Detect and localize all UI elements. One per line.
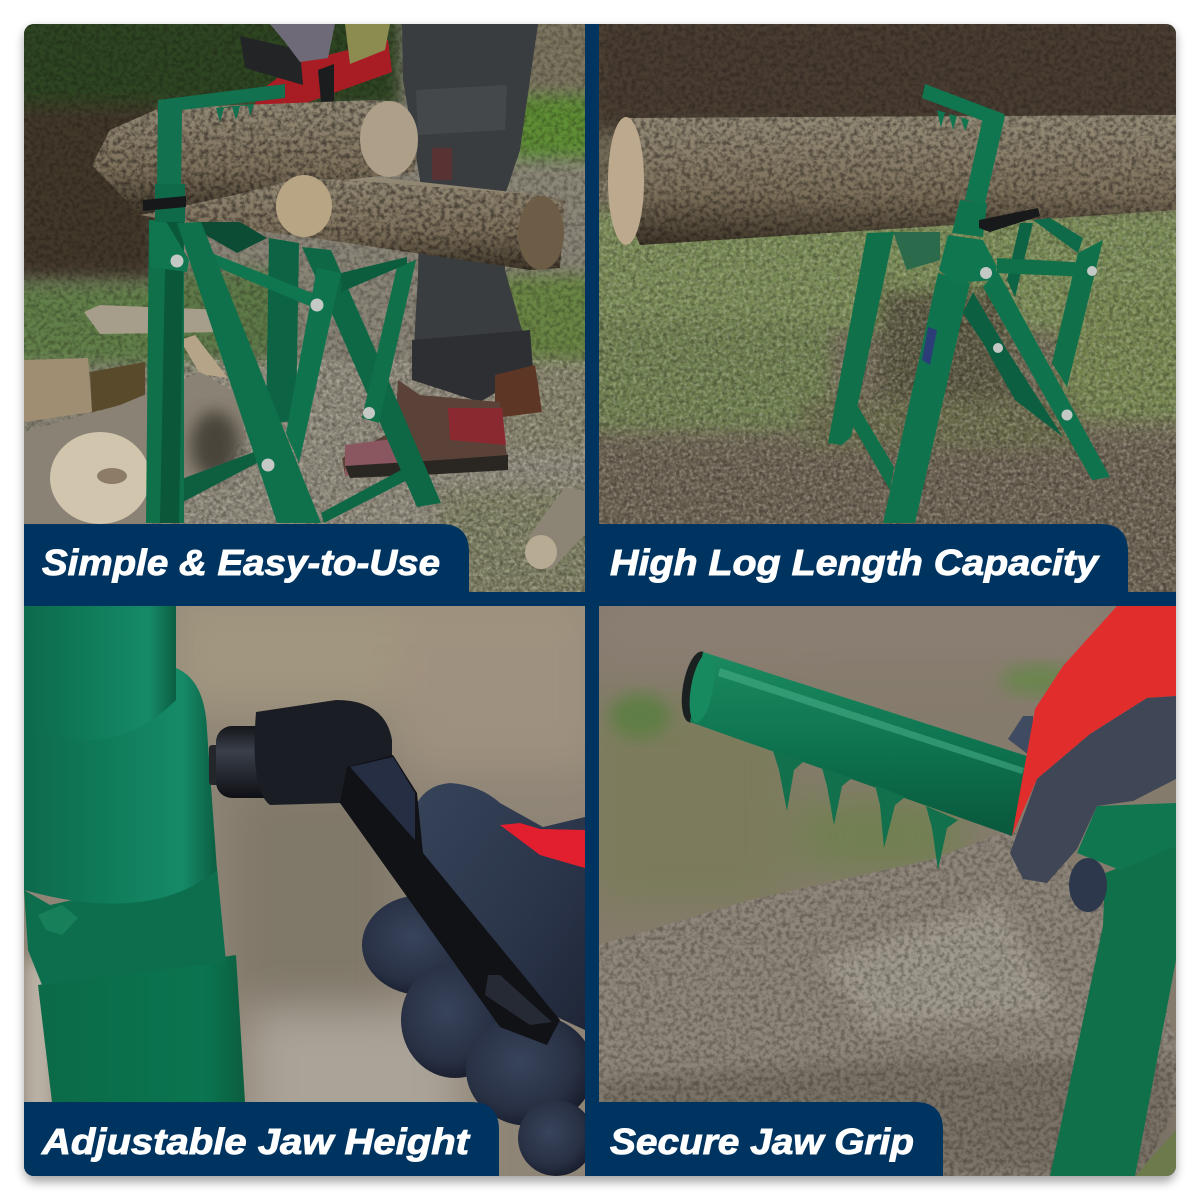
label: Secure Jaw Grip	[585, 1102, 943, 1176]
panel: secure jaw grip photo	[590, 590, 1176, 1176]
glove finger	[1069, 858, 1107, 912]
panel: simple and easy-to-use photo	[10, 10, 600, 600]
trousers	[402, 24, 538, 402]
bolts	[980, 266, 1097, 420]
jaw tube	[677, 649, 1030, 836]
vertical divider	[585, 24, 599, 1176]
log pile	[24, 305, 245, 524]
chainsaw and hand	[240, 24, 392, 104]
stand	[828, 84, 1110, 523]
stand	[143, 84, 441, 523]
label: Simple & Easy-to-Use	[24, 524, 469, 592]
panel: adjustable jaw height photo	[24, 590, 600, 1180]
glove fingers	[362, 895, 594, 1176]
horizontal divider	[24, 592, 1176, 606]
handle arm	[340, 755, 560, 1045]
label: High Log Length Capacity: High Log Length Capacity	[610, 542, 1100, 583]
label: Adjustable Jaw Height	[24, 1102, 499, 1176]
small log	[525, 487, 585, 570]
log	[608, 115, 1176, 245]
glove	[1008, 606, 1176, 883]
logs	[92, 100, 565, 270]
bolts	[170, 254, 375, 472]
boots	[342, 365, 542, 478]
glove red cuff	[500, 823, 585, 868]
spikes	[773, 751, 958, 870]
log	[599, 830, 1176, 1176]
handle	[209, 700, 392, 805]
label: High Log Length Capacity	[585, 524, 1128, 592]
label: Secure Jaw Grip: Secure Jaw Grip	[610, 1121, 914, 1162]
leg	[1050, 803, 1176, 1176]
green post	[24, 606, 245, 1102]
glove palm	[415, 783, 585, 1030]
label: Simple & Easy-to-Use: Simple & Easy-to-Use	[42, 542, 440, 583]
panel: high log length capacity photo	[590, 10, 1190, 610]
label: Adjustable Jaw Height: Adjustable Jaw Height	[41, 1121, 471, 1162]
